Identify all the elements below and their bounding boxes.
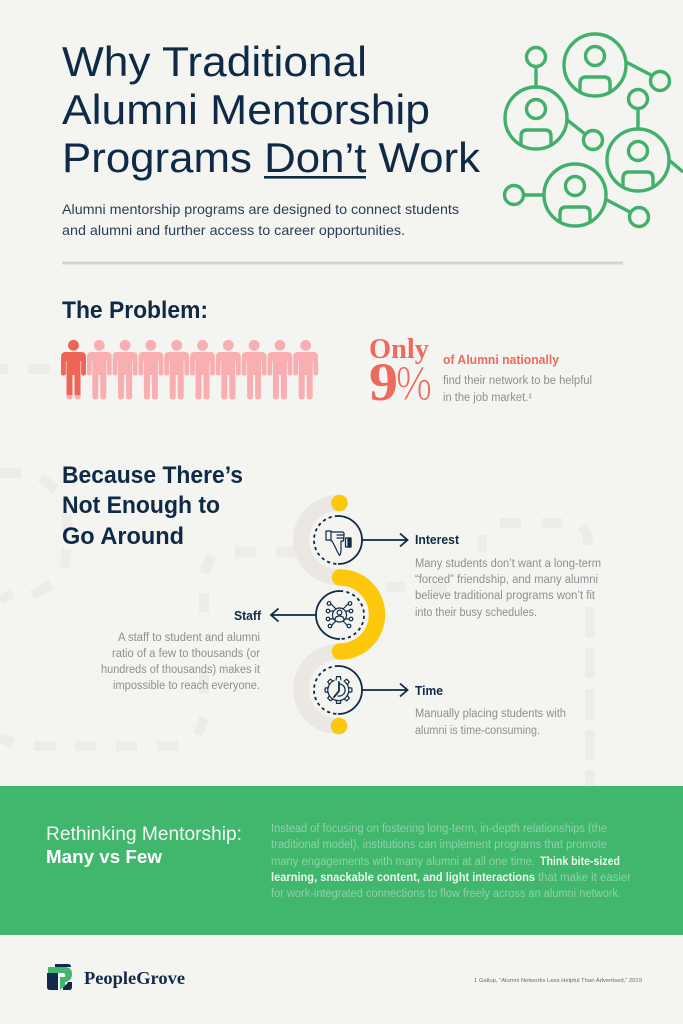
logo: PeopleGrove bbox=[47, 964, 185, 990]
icon: time bbox=[314, 666, 362, 714]
background dashed paths bbox=[0, 369, 590, 786]
text: staff bbox=[101, 609, 262, 692]
arrow: time bbox=[362, 684, 408, 696]
panel heading: Rethinking Mentorship: bbox=[46, 824, 242, 845]
heading: not enough to go around: Because There’s bbox=[62, 462, 243, 489]
statistic: only 9%: 9 bbox=[369, 352, 398, 412]
heading: not enough to go around: Not Enough to bbox=[62, 492, 220, 519]
intro text: and alumni and further access to career opportunities. bbox=[62, 222, 405, 238]
text: time bbox=[415, 684, 566, 737]
footnote: 1 Gallup, “Alumni Networks Less Helpful Than Advertised,” 2019 bbox=[474, 978, 642, 984]
panel paragraph: Think bite-sized bbox=[540, 856, 620, 868]
panel paragraph: learning, snackable content, and light interactions bbox=[271, 872, 535, 884]
panel heading bbox=[46, 824, 242, 867]
panel paragraph: Instead of focusing on fostering long-term, in-depth relationships (the bbox=[271, 823, 607, 835]
panel paragraph: for work-integrated connections to flow freely across an alumni network. bbox=[271, 888, 621, 900]
panel heading: Many vs Few bbox=[46, 847, 163, 867]
statistic description bbox=[443, 353, 592, 404]
yellow dots and arc bbox=[331, 495, 377, 734]
heading: not enough to go around: Go Around bbox=[62, 523, 184, 550]
statistic description: in the job market.¹ bbox=[443, 392, 532, 404]
panel paragraph: traditional model), institutions can implement programs that promote bbox=[271, 839, 607, 851]
text: staff: ratio of a few to thousands (or bbox=[112, 648, 260, 660]
title: Alumni Mentorship bbox=[62, 86, 430, 133]
statistic: only 9%: Only bbox=[369, 333, 429, 365]
title: Why Traditional bbox=[62, 38, 367, 85]
text: interest: Many students don’t want a long-term bbox=[415, 558, 601, 570]
panel paragraph: many engagements with many alumni at all one time. bbox=[271, 856, 535, 868]
logo: PeopleGrove: PeopleGrove bbox=[84, 968, 185, 988]
text: staff: A staff to student and alumni bbox=[118, 632, 260, 644]
panel paragraph bbox=[271, 823, 631, 900]
text: interest: into their busy schedules. bbox=[415, 607, 537, 619]
text: interest: Interest bbox=[415, 533, 460, 547]
statistic: only 9%: % bbox=[396, 358, 432, 411]
statistic description: of Alumni nationally bbox=[443, 353, 559, 367]
panel paragraph: that make it easier bbox=[538, 872, 631, 884]
arrow: interest bbox=[362, 534, 408, 546]
text: time: alumni is time-consuming. bbox=[415, 725, 540, 737]
divider bbox=[62, 262, 623, 264]
text: time: Time bbox=[415, 684, 443, 698]
heading: the problem: The Problem: bbox=[62, 297, 208, 324]
pictogram: 1 in 10 people bbox=[61, 340, 318, 400]
title: Programs Don’t Work bbox=[62, 134, 481, 181]
title bbox=[62, 38, 481, 181]
text: interest bbox=[415, 533, 601, 619]
pale arcs bbox=[301, 503, 338, 726]
arrow: staff bbox=[271, 608, 316, 622]
text: time: Manually placing students with bbox=[415, 708, 566, 720]
heading: not enough to go around bbox=[62, 462, 243, 550]
statistic: only 9% bbox=[369, 333, 432, 412]
icon: staff bbox=[316, 591, 364, 639]
icon: interest bbox=[314, 516, 362, 564]
intro text bbox=[62, 201, 459, 238]
text: staff: Staff bbox=[234, 609, 262, 623]
text: staff: impossible to reach everyone. bbox=[113, 680, 260, 692]
icon: alumni network bbox=[504, 34, 683, 226]
text: interest: believe traditional programs won’t fit bbox=[415, 590, 596, 602]
text: staff: hundreds of thousands) makes it bbox=[101, 664, 261, 676]
text: interest: “forced” friendship, and many alumni bbox=[415, 574, 598, 586]
intro text: Alumni mentorship programs are designed to connect students bbox=[62, 201, 459, 217]
statistic description: find their network to be helpful bbox=[443, 375, 592, 387]
panel: rethinking mentorship bbox=[0, 786, 683, 935]
central diagram bbox=[301, 495, 377, 734]
